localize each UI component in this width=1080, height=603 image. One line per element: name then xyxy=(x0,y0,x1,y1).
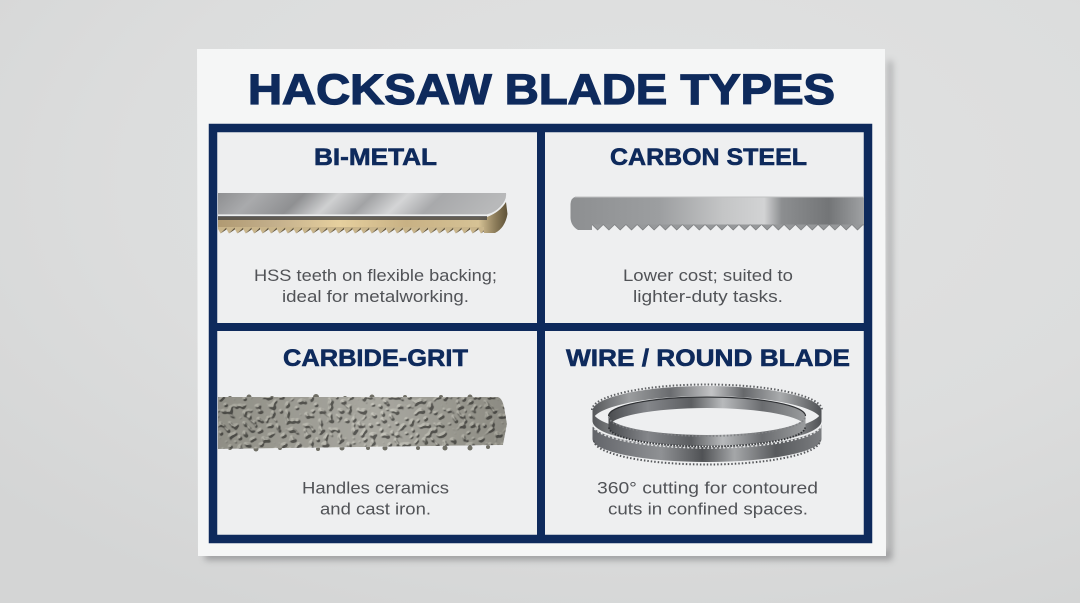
heading: bi-metal: BI-METAL xyxy=(314,144,437,171)
description: wire / round blade xyxy=(597,478,818,518)
description: carbide-grit: Handles ceramics xyxy=(302,478,449,498)
description: carbon steel: lighter-duty tasks. xyxy=(633,287,783,306)
description: bi-metal: HSS teeth on flexible backing; xyxy=(254,266,497,285)
paper sheet xyxy=(197,49,886,556)
icon: carbide-grit blade xyxy=(218,394,507,452)
upper outer coil xyxy=(592,385,822,446)
description: bi-metal: ideal for metalworking. xyxy=(282,287,469,306)
heading: carbide-grit: CARBIDE-GRIT xyxy=(283,345,468,372)
description: carbide-grit xyxy=(302,478,449,518)
panel: carbon steel xyxy=(570,144,864,306)
description: carbon steel xyxy=(623,266,793,306)
description: wire / round blade: 360° cutting for contoured xyxy=(597,478,818,498)
title: HACKSAW BLADE TYPES xyxy=(248,66,835,114)
icon: coiled round blade xyxy=(592,385,822,464)
icon: bi-metal blade xyxy=(218,193,508,234)
description: carbide-grit: and cast iron. xyxy=(320,500,431,518)
panel: wire / round blade xyxy=(566,345,850,518)
description: carbon steel: Lower cost; suited to xyxy=(623,266,793,285)
description: bi-metal xyxy=(254,266,497,306)
icon: carbon steel blade xyxy=(570,196,864,231)
navy grid frame xyxy=(213,128,868,539)
panel: carbide-grit xyxy=(218,345,507,518)
paper shadow xyxy=(205,60,892,560)
heading: carbon steel: CARBON STEEL xyxy=(610,144,807,171)
heading: wire / round blade: WIRE / ROUND BLADE xyxy=(566,345,850,372)
inner coil xyxy=(608,397,806,446)
panel: bi-metal xyxy=(218,144,508,306)
lower coil xyxy=(592,424,822,464)
description: wire / round blade: cuts in confined spaces. xyxy=(608,500,808,518)
